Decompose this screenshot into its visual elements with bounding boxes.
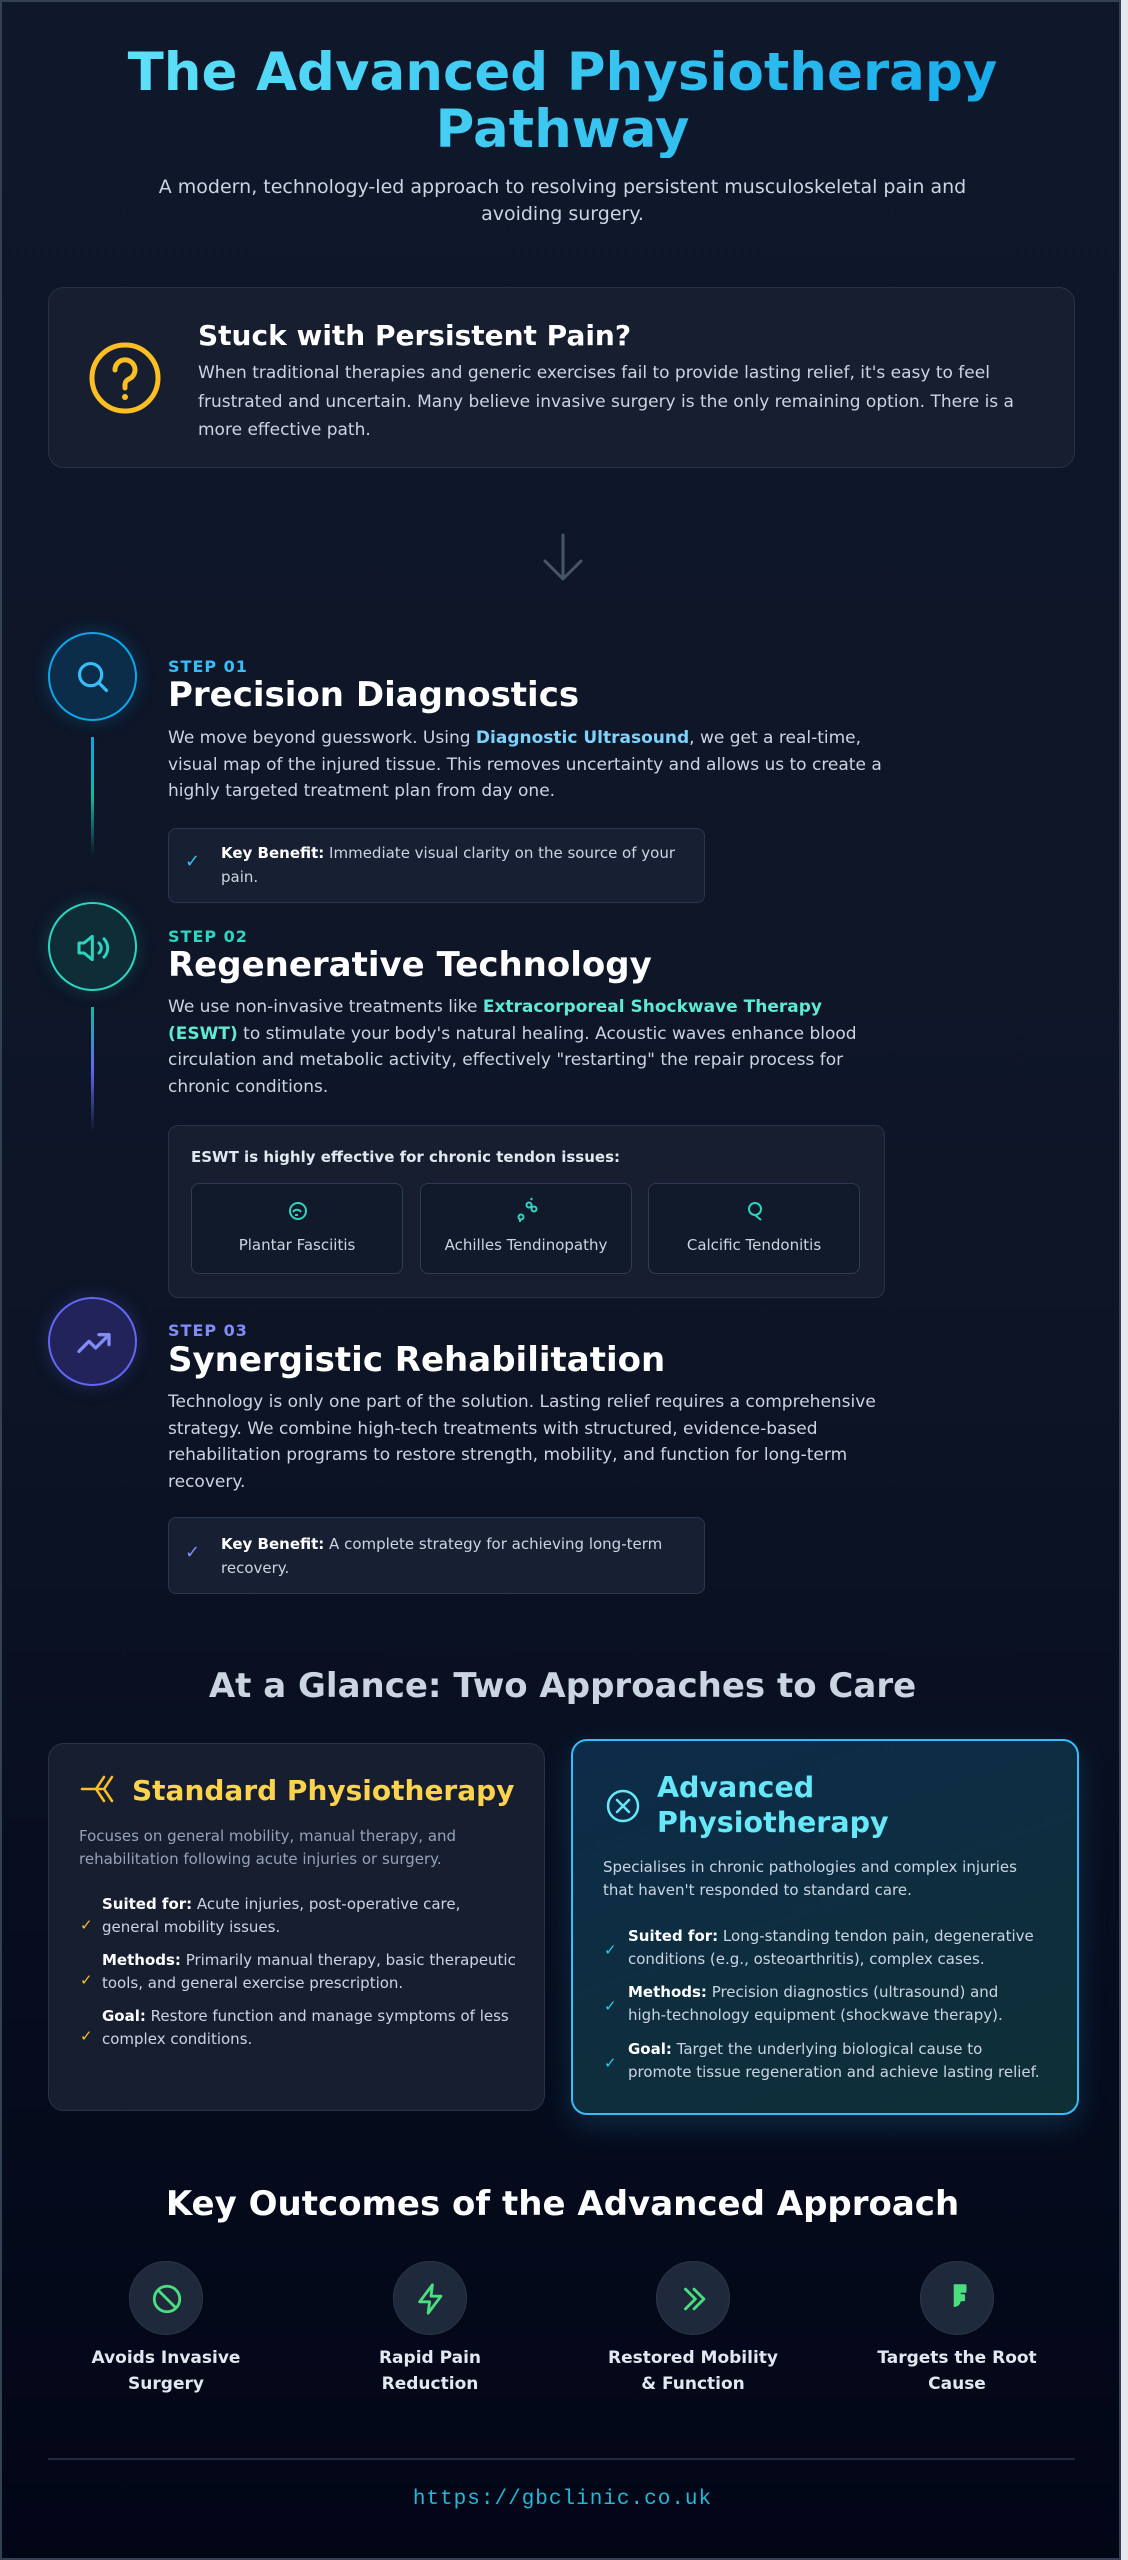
outcome: rapid pain reduction: Rapid Pain xyxy=(379,2348,481,2368)
heading: ESWT is highly effective for chronic tendon issues: xyxy=(191,1148,620,1166)
icon: chevrons xyxy=(656,2261,730,2335)
icon: x circle xyxy=(606,1790,640,1822)
text block: chronic conditions. xyxy=(168,1076,328,1096)
panel: standard physiotherapy: Goal: Restore function and manage symptoms of less xyxy=(102,2007,509,2025)
outcome: avoids surgery xyxy=(92,2261,240,2394)
heading: Precision Diagnostics xyxy=(168,675,579,715)
text block: more effective path. xyxy=(198,420,371,440)
text block: rehabilitation following acute injuries or surgery. xyxy=(79,1850,442,1868)
sub-card: plantar fasciitis: Plantar Fasciitis xyxy=(239,1236,355,1254)
callout: key benefit: Key Benefit: Immediate visual clarity on the source of your xyxy=(221,844,675,862)
outcome: restored mobility: & Function xyxy=(641,2374,745,2394)
text block xyxy=(168,997,857,1096)
panel: advanced physiotherapy: Suited for: Long-standing tendon pain, degenerative xyxy=(628,1927,1034,1945)
footer url: https://gbclinic.co.uk xyxy=(413,2488,712,2511)
heading: Physiotherapy xyxy=(657,1806,889,1839)
text block: recovery. xyxy=(168,1472,245,1492)
text block: Specialises in chronic pathologies and complex injuries xyxy=(603,1858,1017,1876)
icon: ban xyxy=(129,2261,203,2335)
panel: standard physiotherapy: Methods: Primarily manual therapy, basic therapeutic xyxy=(102,1951,516,1969)
text block: When traditional therapies and generic exercises fail to provide lasting relief, it's easy to feel xyxy=(198,363,990,383)
panel: standard physiotherapy: general mobility issues. xyxy=(102,1918,280,1936)
panel: advanced physiotherapy: ✓ xyxy=(604,2054,617,2072)
title: The Advanced Physiotherapy xyxy=(128,42,997,103)
heading: Synergistic Rehabilitation xyxy=(168,1340,665,1380)
panel: standard physiotherapy: ✓ xyxy=(80,2027,93,2045)
step label: STEP 02 xyxy=(168,927,248,946)
outcome: avoids surgery: Surgery xyxy=(128,2374,204,2394)
panel: advanced physiotherapy xyxy=(571,1739,1079,2115)
callout: key benefit: ✓ xyxy=(185,1542,200,1563)
panel: standard physiotherapy xyxy=(48,1743,545,2111)
step label: STEP 01 xyxy=(168,657,248,676)
text block xyxy=(168,728,882,801)
outcome: restored mobility: Restored Mobility xyxy=(608,2348,778,2368)
text block xyxy=(198,363,1014,440)
sub-card: plantar fasciitis xyxy=(191,1183,403,1274)
text block: (ESWT) to stimulate your body's natural healing. Acoustic waves enhance blood xyxy=(168,1024,857,1044)
step 1 xyxy=(41,625,882,903)
text block: frustrated and uncertain. Many believe invasive surgery is the only remaining option. There is a xyxy=(198,392,1014,412)
subtitle: A modern, technology-led approach to resolving persistent musculoskeletal pain and xyxy=(159,176,966,198)
panel: advanced physiotherapy: high-technology equipment (shockwave therapy). xyxy=(628,2006,1003,2024)
text block: Focuses on general mobility, manual therapy, and xyxy=(79,1827,456,1845)
bullets xyxy=(604,1927,1040,2081)
icon: arrows xyxy=(80,1776,114,1802)
text block: strategy. We combine high-tech treatments with structured, evidence-based xyxy=(168,1418,818,1438)
heading: at a glance: At a Glance: Two Approaches to Care xyxy=(209,1666,916,1706)
heading: Advanced xyxy=(657,1771,814,1804)
sub-card: achilles xyxy=(420,1183,632,1274)
outcome: targets root cause xyxy=(877,2261,1037,2394)
panel: advanced physiotherapy: Goal: Target the underlying biological cause to xyxy=(628,2040,982,2058)
text block: circulation and metabolic activity, effectively "restarting" the repair process for xyxy=(168,1050,843,1070)
panel: standard physiotherapy: Suited for: Acute injuries, post-operative care, xyxy=(102,1895,460,1913)
subtitle: avoiding surgery. xyxy=(481,203,644,225)
sub-card: calcific xyxy=(648,1183,860,1274)
subtitle xyxy=(158,176,966,225)
title xyxy=(2,44,1123,158)
text block: that haven't responded to standard care. xyxy=(603,1881,912,1899)
outcome: rapid pain reduction xyxy=(379,2261,481,2394)
callout: key benefit: Key Benefit: A complete strategy for achieving long-term xyxy=(221,1535,662,1553)
outcome: restored mobility xyxy=(608,2261,778,2394)
step 3 xyxy=(40,1290,876,1594)
panel: advanced physiotherapy: ✓ xyxy=(604,1997,617,2015)
step 2 xyxy=(42,896,885,1298)
outcome: targets root cause: Cause xyxy=(928,2374,986,2394)
heading: Stuck with Persistent Pain? xyxy=(198,319,631,352)
text block xyxy=(79,1827,456,1868)
arrow: down xyxy=(544,534,582,580)
bullets xyxy=(80,1895,516,2048)
text block: highly targeted treatment plan from day one. xyxy=(168,781,555,801)
callout: key benefit: pain. xyxy=(221,868,258,886)
panel: advanced physiotherapy: conditions (e.g., osteoarthritis), complex cases. xyxy=(628,1950,985,1968)
panel: ESWT conditions xyxy=(168,1125,885,1298)
icon: trending up xyxy=(48,1297,137,1386)
heading xyxy=(657,1771,889,1839)
step label: STEP 03 xyxy=(168,1321,248,1340)
text block: Technology is only one part of the solution. Lasting relief requires a comprehensive xyxy=(168,1392,876,1412)
heading: Standard Physiotherapy xyxy=(132,1774,514,1807)
outcome: avoids surgery: Avoids Invasive xyxy=(92,2348,240,2368)
title: Pathway xyxy=(436,99,689,160)
icon: search xyxy=(48,632,137,721)
callout: key benefit xyxy=(168,1517,705,1594)
text block xyxy=(168,1392,876,1492)
panel: advanced physiotherapy: promote tissue regeneration and achieve lasting relief. xyxy=(628,2063,1040,2081)
outcome: targets root cause: Targets the Root xyxy=(877,2348,1037,2368)
icon: lightning xyxy=(393,2261,467,2335)
outcome: rapid pain reduction: Reduction xyxy=(382,2374,478,2394)
panel: standard physiotherapy: tools, and general exercise prescription. xyxy=(102,1974,403,1992)
panel: standard physiotherapy: complex conditions. xyxy=(102,2030,252,2048)
text block: We move beyond guesswork. Using Diagnostic Ultrasound, we get a real-time, xyxy=(168,728,861,748)
text block: rehabilitation programs to restore strength, mobility, and function for long-term xyxy=(168,1445,847,1465)
panel: standard physiotherapy: ✓ xyxy=(80,1971,93,1989)
callout: key benefit: recovery. xyxy=(221,1559,289,1577)
panel: standard physiotherapy: ✓ xyxy=(80,1916,93,1934)
text block: visual map of the injured tissue. This removes uncertainty and allows us to create a xyxy=(168,754,882,774)
panel: advanced physiotherapy: Methods: Precision diagnostics (ultrasound) and xyxy=(628,1983,998,2001)
callout: key benefit: ✓ xyxy=(185,851,200,872)
panel: advanced physiotherapy: ✓ xyxy=(604,1941,617,1959)
icon: speaker xyxy=(48,902,137,991)
callout: key benefit xyxy=(168,828,705,903)
text block xyxy=(603,1858,1017,1899)
sub-card: achilles: Achilles Tendinopathy xyxy=(445,1236,607,1254)
panel: stuck with persistent pain xyxy=(48,287,1075,468)
icon: question circle xyxy=(90,342,160,414)
heading: key outcomes: Key Outcomes of the Advanced Approach xyxy=(166,2184,959,2224)
icon: root xyxy=(920,2261,994,2335)
heading: Regenerative Technology xyxy=(168,945,652,985)
sub-card: calcific: Calcific Tendonitis xyxy=(687,1236,821,1254)
text block: We use non-invasive treatments like Extracorporeal Shockwave Therapy xyxy=(168,997,822,1017)
